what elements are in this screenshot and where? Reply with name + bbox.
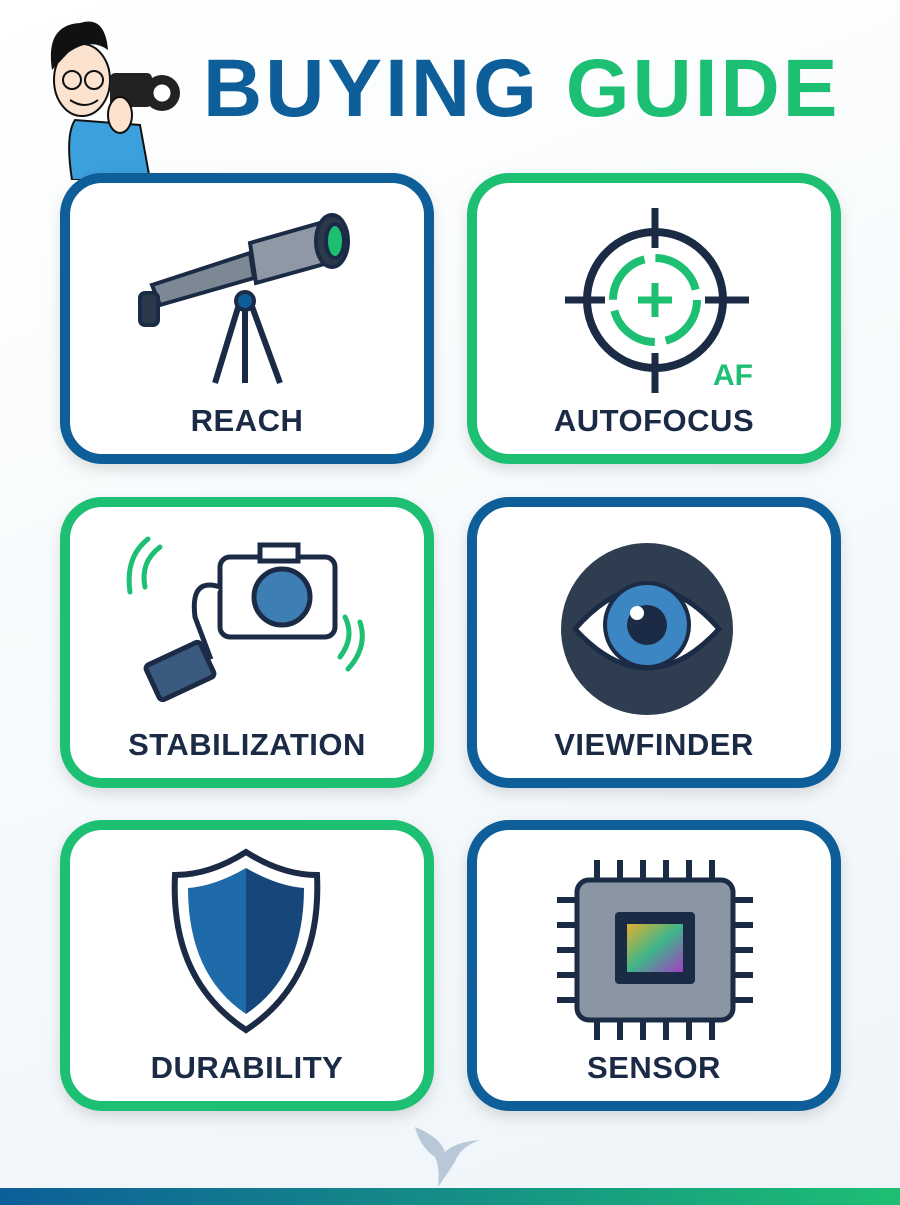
- label: REACH: [191, 403, 303, 438]
- label: SENSOR: [587, 1050, 721, 1085]
- icon: bird: [415, 1127, 480, 1187]
- panel: viewfinder: [467, 497, 841, 788]
- mascot photographer: [50, 22, 180, 180]
- label: AUTOFOCUS: [554, 403, 754, 438]
- icon: focus target: AF: [713, 359, 753, 392]
- panel: stabilization: [60, 497, 434, 788]
- icon: telescope: [138, 213, 350, 384]
- label: DURABILITY: [151, 1050, 343, 1085]
- icon: eye: [561, 543, 733, 715]
- label: VIEWFINDER: [554, 727, 754, 762]
- panel: reach: [60, 173, 434, 464]
- icon: hand with camera: [126, 536, 365, 702]
- panel: autofocus: [467, 173, 841, 464]
- panel: sensor: [467, 820, 841, 1111]
- title: BUYING GUIDE: [203, 43, 840, 134]
- icon: sensor chip: [557, 860, 753, 1040]
- bottom bar: [0, 1188, 900, 1205]
- panel: durability: [60, 820, 434, 1111]
- icon: focus target: [565, 208, 753, 393]
- label: STABILIZATION: [128, 727, 366, 762]
- icon: shield: [172, 848, 320, 1034]
